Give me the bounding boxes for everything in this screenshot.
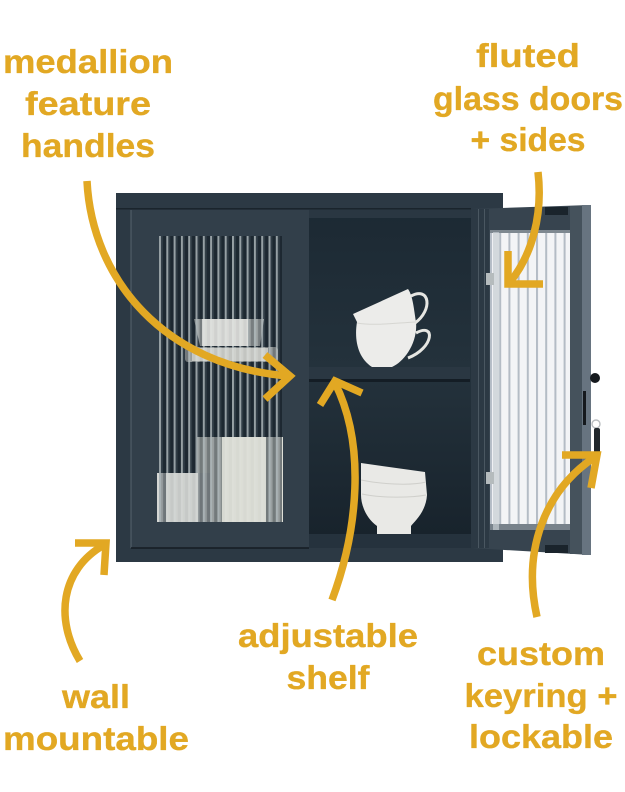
arrow: adjustable shelf (320, 381, 362, 600)
fluted glass panel (490, 232, 570, 530)
label: fluted glass doors + sides: fluted (476, 37, 580, 74)
label: custom keyring + lockable: lockable (469, 718, 613, 755)
cabinet interior (309, 209, 471, 534)
cabinet body (116, 193, 503, 562)
label: wall mountable: mountable (3, 720, 189, 757)
stack of plates behind glass (197, 437, 283, 522)
label: wall mountable: wall (61, 678, 130, 715)
keyring (592, 420, 600, 459)
label: adjustable shelf: shelf (286, 659, 371, 696)
cabinet (116, 193, 600, 562)
left sliding door (131, 210, 309, 548)
label: medallion feature handles (3, 43, 173, 164)
open right door (471, 205, 600, 555)
lock knob (590, 373, 600, 383)
arrow: medallion handles (87, 181, 290, 399)
label: medallion feature handles: feature (25, 85, 151, 122)
middle shelf (309, 367, 470, 382)
label: adjustable shelf: adjustable (238, 617, 418, 654)
arrow: keyring (532, 455, 597, 617)
label: custom keyring + lockable: keyring + (464, 677, 618, 714)
stacked bowls (361, 463, 427, 534)
label: medallion feature handles: handles (21, 127, 155, 164)
arrow: wall mountable (65, 543, 106, 661)
stacked bowl and plates (194, 319, 264, 346)
bottom shelf panel (309, 534, 471, 548)
label: adjustable shelf (238, 617, 418, 696)
label: medallion feature handles: medallion (3, 43, 173, 80)
fluted window with dishes (157, 236, 283, 522)
label: custom keyring + lockable: custom (477, 635, 605, 672)
stack of small bowls (157, 473, 210, 522)
label: custom keyring + lockable (464, 635, 618, 755)
arrow: fluted glass (508, 172, 543, 284)
label: fluted glass doors + sides (433, 37, 623, 158)
label: fluted glass doors + sides: + sides (470, 121, 586, 158)
door hardware (545, 207, 568, 215)
key slot (583, 391, 586, 425)
label: wall mountable (3, 678, 189, 757)
stacked cups (353, 289, 429, 367)
hinges (486, 273, 494, 285)
label: fluted glass doors + sides: glass doors (433, 80, 623, 117)
